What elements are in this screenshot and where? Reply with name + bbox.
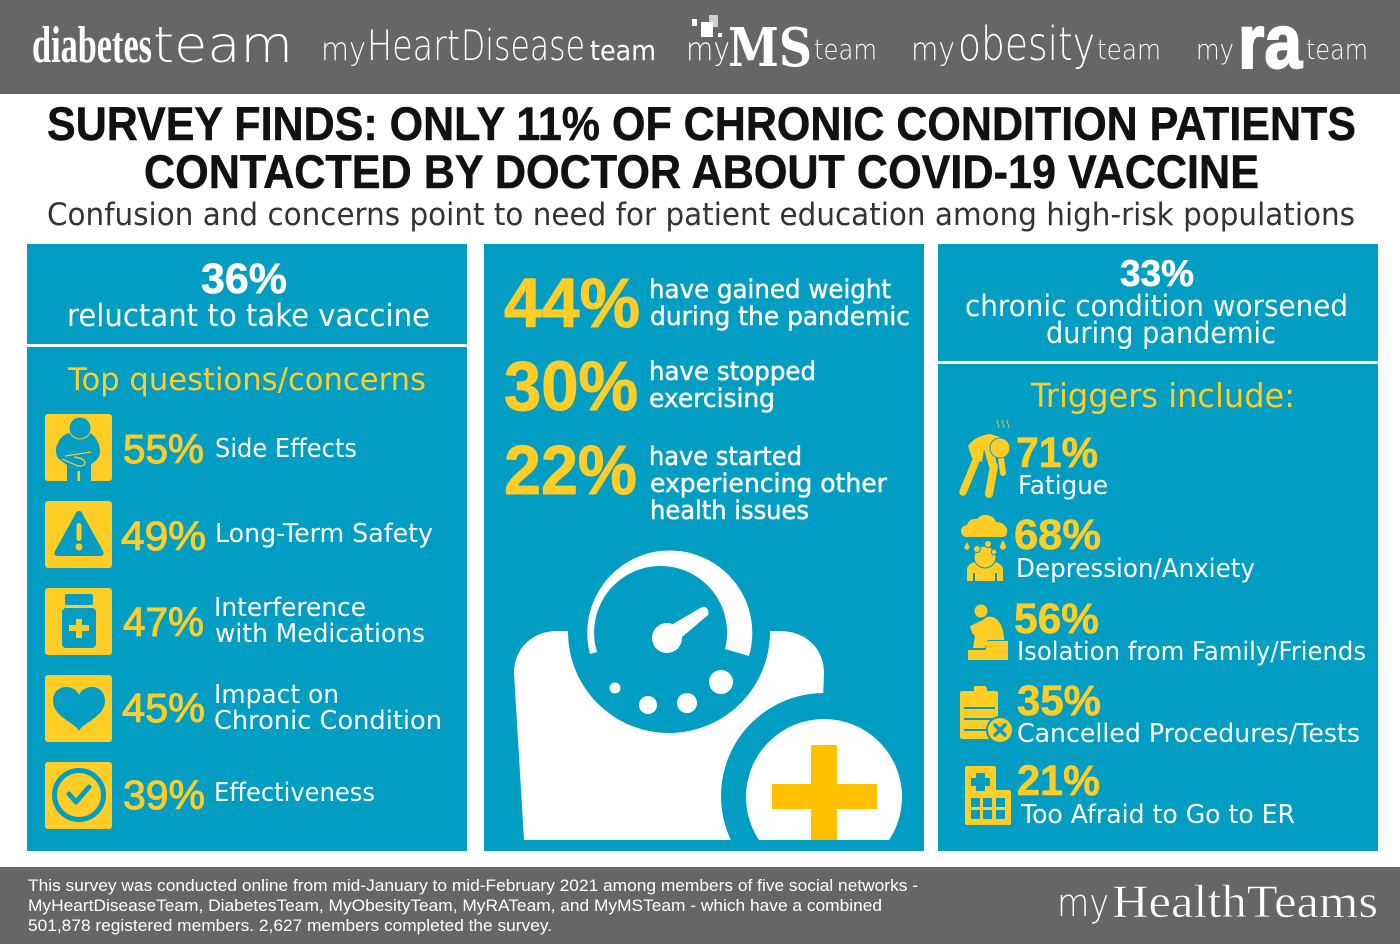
stat: 33% worsened: chronic condition worsened [965,289,1348,323]
stat: 30% stopped exercising: 30% [504,347,638,425]
stat: 45% impact: 45% [122,685,205,731]
stat: 45% impact: Chronic Condition [214,706,442,736]
stat: 49% long-term safety: 49% [121,513,206,559]
stat: 35% cancelled: 35% [1017,677,1101,725]
footer band [0,867,1400,944]
icon: rain cloud and head [961,515,1007,581]
stat: 49% long-term safety: Long-Term Safety [215,519,433,549]
survey methodology note: MyHeartDiseaseTeam, DiabetesTeam, MyObesityTeam, MyRATeam, and MyMSTeam - which have a combined [28,897,882,915]
icon: fatigued person [963,420,1010,494]
logo: myMSteam [686,15,877,79]
panel: pandemic effects [484,244,927,899]
stat: 22% other health issues: have started [649,442,802,472]
stat: 33% worsened: during pandemic [1046,316,1276,350]
logo: myHeartDiseaseteam: Disease [461,21,585,70]
survey methodology note: 501,878 registered members. 2,627 members completed the survey. [28,917,552,935]
icon: seated isolated person [968,604,1008,660]
stat: 44% gained weight: during the pandemic [650,302,910,332]
stat: 33% worsened: 33% [1120,253,1194,294]
stat: 55% side effects [123,426,357,472]
title: CONTACTED BY DOCTOR ABOUT COVID-19 VACCINE [144,145,1259,198]
panel: reluctant to take vaccine [27,244,467,851]
icon: heart [45,675,112,742]
stat: 33% worsened [965,253,1348,350]
stat: 56% isolation: Isolation from Family/Friends [1017,637,1366,667]
logo: diabetesteam: team [153,16,293,74]
logo: myobesityteam [911,17,1161,71]
icon: medicine bottle [45,588,112,655]
stat: 47% interference [123,593,425,649]
stat: 68% depression [1014,511,1255,584]
stat: 45% impact: Impact on [214,680,339,710]
stat: 39% effectiveness: 39% [123,772,205,818]
icon: clipboard with cross [960,686,1013,743]
stat: 22% other health issues: health issues [650,496,809,526]
stat: 56% isolation: 56% [1014,595,1099,643]
stat: 44% gained weight: 44% [504,264,640,342]
logo: myMSteam: my [686,30,730,68]
icon: hospital building [965,766,1011,825]
stat: 44% gained weight: have gained weight [649,275,891,305]
stat: 55% side effects: 55% [123,426,204,472]
survey methodology note [28,877,918,935]
logo: myHeartDiseaseteam: team [590,34,656,67]
header band with partner logos [0,0,1400,94]
stat: 68% depression: 68% [1014,511,1101,559]
stat: 71% fatigue: 71% [1016,429,1098,477]
stat: 22% other health issues [504,431,887,526]
stat: 39% effectiveness: Effectiveness [214,778,375,808]
stat: 36% reluctant [67,255,430,334]
icon: check circle [45,762,112,829]
logo: myHealthTeams: my [1057,881,1109,925]
stat: 68% depression: Depression/Anxiety [1016,554,1255,584]
stat: 44% gained weight [504,264,910,342]
stat: 36% reluctant: reluctant to take vaccine [67,298,430,334]
logo: myHeartDiseaseteam: my [321,30,366,68]
stat: 35% cancelled [1017,677,1360,749]
stat: 47% interference: Interference [214,593,366,623]
stat: 21% ER: 21% [1017,757,1100,805]
stat: 71% fatigue [1016,429,1108,501]
logo: myobesityteam: obesity [958,17,1095,71]
logo: myHealthTeams: HealthTeams [1112,876,1378,928]
logo: myrateam: my [1196,33,1234,66]
heading: triggers: Triggers include: [1030,376,1295,415]
stat: 47% interference: with Medications [215,619,425,649]
stat: 49% long-term safety [121,513,433,559]
subtitle: Confusion and concerns point to need for patient education among high-risk populations [47,197,1355,233]
logo: myMSteam: MS [728,17,812,79]
logo: myMSteam: team [814,33,877,66]
logo: myobesityteam: team [1097,33,1161,66]
stat: 45% impact [122,680,442,736]
icon: stomach ache person [45,414,112,481]
logo: myHeartDiseaseteam [321,21,656,70]
stat: 36% reluctant: 36% [201,255,287,303]
stat: 22% other health issues: 22% [504,431,637,509]
icon: warning triangle [45,501,112,568]
stat: 30% stopped exercising: have stopped [649,357,816,387]
logo: myHeartDiseaseteam: Heart [367,21,460,70]
logo: diabetesteam [32,16,293,74]
icon: weighing scale with plus [514,550,902,840]
stat: 71% fatigue: Fatigue [1018,471,1108,501]
stat: 22% other health issues: experiencing other [650,469,887,499]
heading: top questions: Top questions/concerns [67,362,426,398]
stat: 55% side effects: Side Effects [215,434,357,464]
stat: 30% stopped exercising [504,347,816,425]
logo: diabetesteam: diabetes [32,17,152,74]
stat: 21% ER [1017,757,1295,830]
stat: 47% interference: 47% [123,599,204,645]
panel: chronic condition worsened [938,244,1378,851]
title [47,97,1356,198]
stat: 21% ER: Too Afraid to Go to ER [1020,800,1295,830]
logo: myrateam: ra [1238,0,1303,85]
survey methodology note: This survey was conducted online from mid-January to mid-February 2021 among members of five social networks - [28,877,918,895]
logo: myrateam [1196,0,1368,85]
stat: 30% stopped exercising: exercising [649,384,775,414]
stat: 35% cancelled: Cancelled Procedures/Tests [1017,719,1360,749]
logo: myrateam: team [1306,33,1368,66]
stat: 39% effectiveness [123,772,375,818]
logo: myobesityteam: my [911,30,955,68]
stat: 56% isolation [1014,595,1366,667]
